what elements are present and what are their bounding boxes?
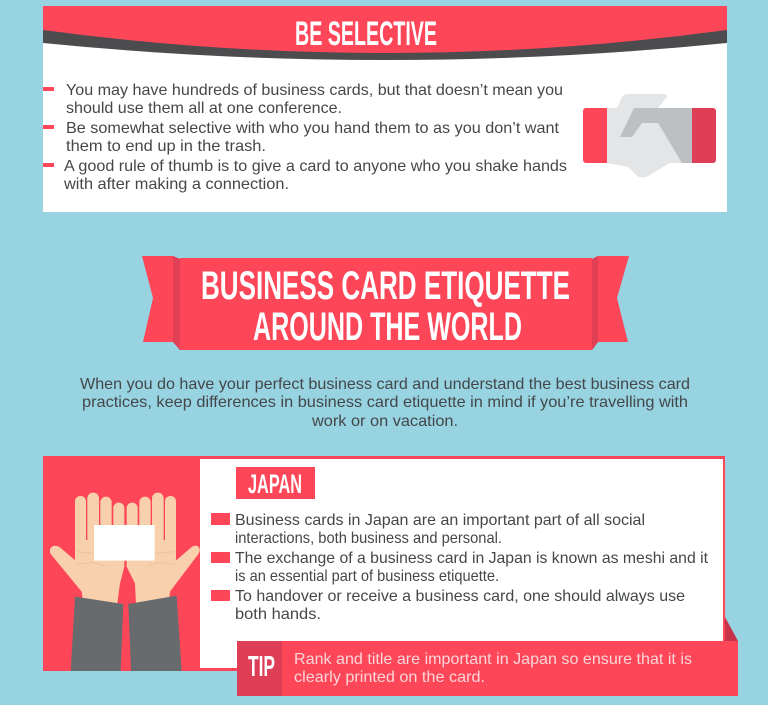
bullet text: You may have hundreds of business cards, but that doesn’t mean you <box>66 82 563 99</box>
callout: tip: TIP <box>248 651 275 683</box>
callout: tip: clearly printed on the card. <box>294 669 485 686</box>
heading ribbon <box>43 6 727 60</box>
illustration: hands holding a card <box>50 493 200 671</box>
bullet text <box>235 512 709 623</box>
tag: japan: JAPAN <box>248 469 302 499</box>
callout: tip <box>237 617 738 696</box>
banner title text: BUSINESS CARD ETIQUETTE <box>201 264 570 308</box>
bullet text: both hands. <box>235 606 321 623</box>
intro paragraph <box>80 376 690 430</box>
bullet text <box>63 82 567 193</box>
bullet text: The exchange of a business card in Japan is known as meshi and it <box>235 550 709 567</box>
bullet text: Be somewhat selective with who you hand them to as you don’t want <box>66 120 560 137</box>
callout: tip: Rank and title are important in Japan so ensure that it is <box>294 651 692 668</box>
bullet text: should use them all at one conference. <box>66 100 342 117</box>
icon: handshake <box>583 94 716 178</box>
heading: be selective: BE SELECTIVE <box>295 15 437 53</box>
intro paragraph: practices, keep differences in business card etiquette in mind if you’re travelling with <box>82 394 688 411</box>
bullet text: them to end up in the trash. <box>66 138 266 155</box>
banner title text: AROUND THE WORLD <box>253 305 522 349</box>
banner title text <box>201 264 570 349</box>
tag: japan <box>236 467 315 499</box>
intro paragraph: When you do have your perfect business card and understand the best business card <box>80 376 690 393</box>
bullet text: A good rule of thumb is to give a card to anyone who you shake hands <box>64 158 567 175</box>
bullet markers <box>43 87 54 167</box>
bullet text: To handover or receive a business card, one should always use <box>235 588 685 605</box>
bullet text: is an essential part of business etiquette. <box>235 568 499 585</box>
bullet text: interactions, both business and personal. <box>235 530 502 547</box>
intro paragraph: work or on vacation. <box>311 413 458 430</box>
bullet text: with after making a connection. <box>63 176 289 193</box>
bullet text: Business cards in Japan are an important part of all social <box>235 512 645 529</box>
bullet markers <box>211 513 230 601</box>
banner: section title <box>142 256 629 350</box>
panel: japan <box>43 456 738 696</box>
panel: be selective <box>43 6 727 212</box>
